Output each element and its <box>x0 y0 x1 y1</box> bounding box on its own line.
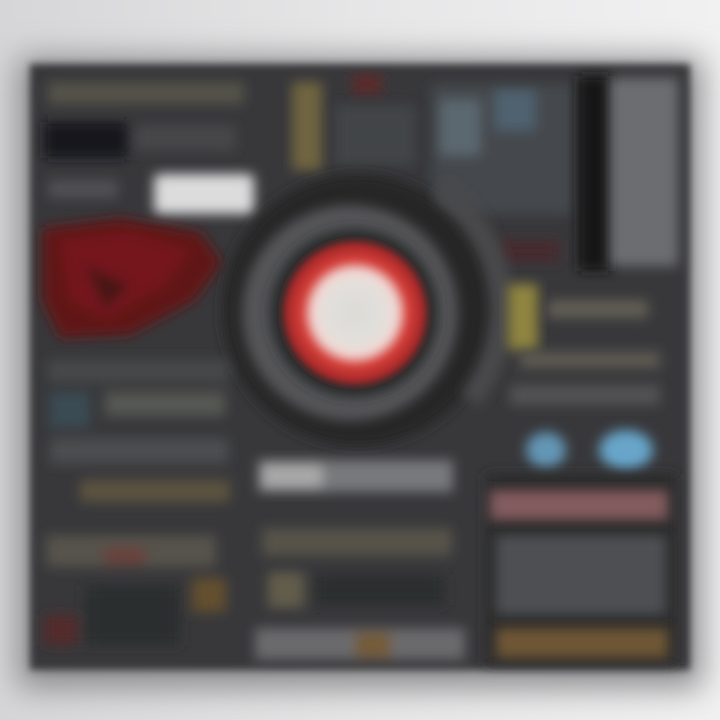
central gauge <box>222 174 502 446</box>
table body <box>496 535 666 615</box>
panel: right grey column <box>610 78 678 266</box>
panel: bottom-left block <box>44 535 226 645</box>
gauge outer dark ring <box>222 174 494 446</box>
centre white label <box>258 460 453 492</box>
yellow marker right <box>508 284 538 350</box>
panel: right black column <box>578 76 612 271</box>
panel: dark board <box>30 64 690 670</box>
gauge outer light arc <box>440 190 502 400</box>
white label block <box>154 174 254 214</box>
panel: bottom-centre block <box>255 528 465 660</box>
panel: top-right blue chart <box>432 84 572 262</box>
panel: top-left header block <box>44 82 244 198</box>
gauge inner dark ring <box>270 229 438 397</box>
table pink header <box>490 490 668 520</box>
gauge red and white centre <box>283 241 427 385</box>
top center text strip <box>335 105 415 165</box>
blue icons <box>526 430 653 470</box>
panel: left middle text <box>48 360 230 502</box>
top yellow column <box>292 82 322 170</box>
gauge grey ring <box>242 205 458 421</box>
top red marker <box>352 74 382 94</box>
table orange footer <box>496 628 668 658</box>
panel: red map shape <box>42 218 222 338</box>
panel: bottom-right table <box>486 474 676 664</box>
panel: right middle text <box>510 300 660 405</box>
